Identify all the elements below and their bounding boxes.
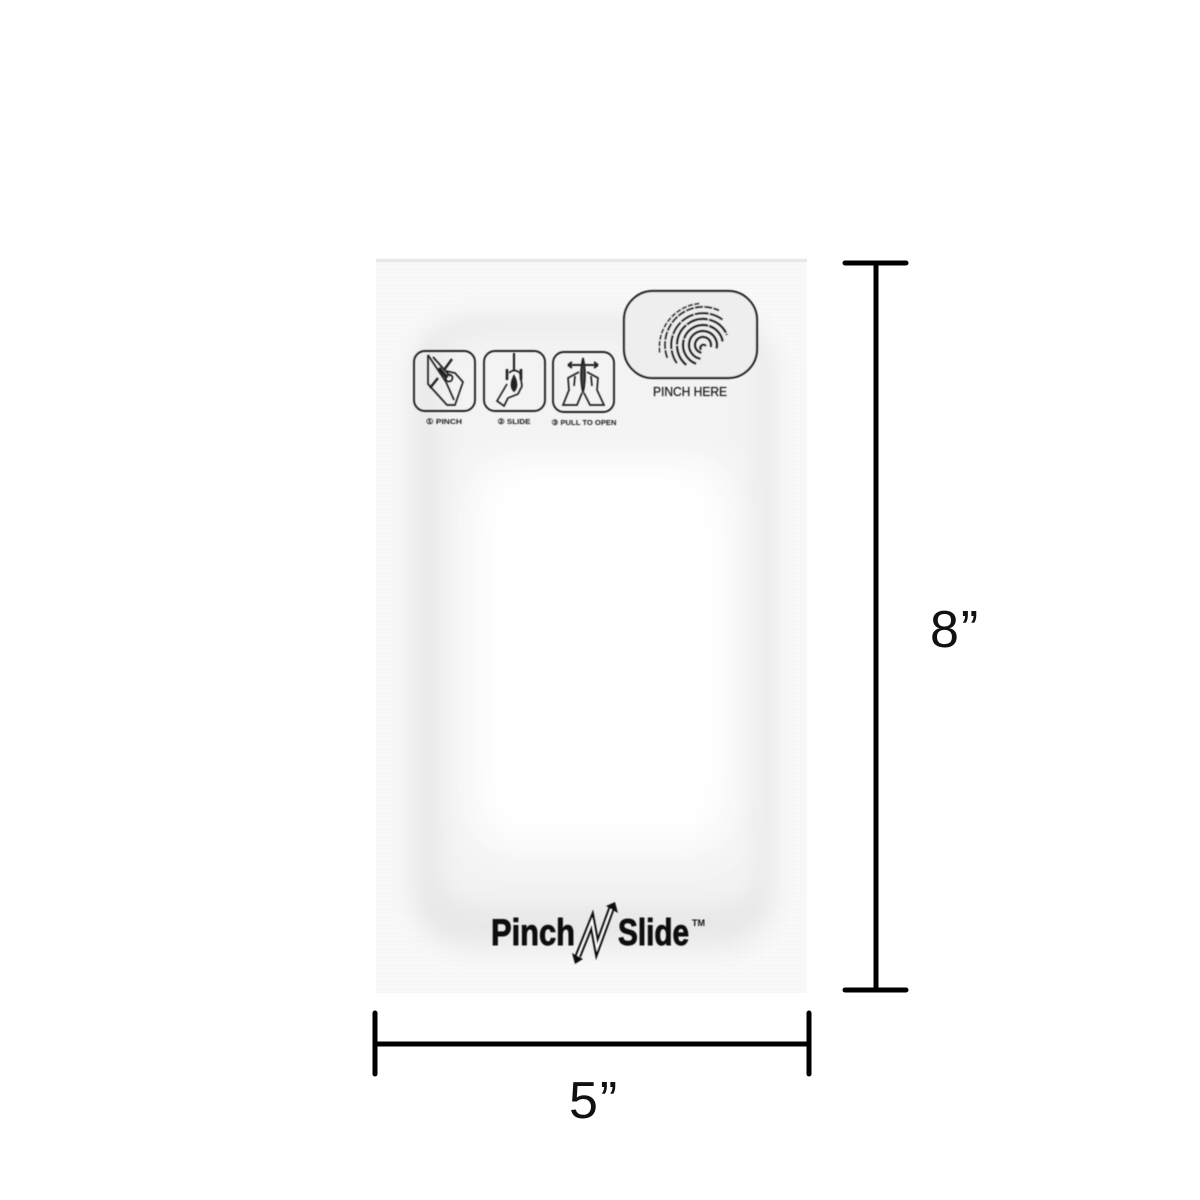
dimension: height: [845, 263, 906, 990]
brand logo: TM: [692, 918, 705, 928]
instruction icon: slide: [484, 351, 545, 411]
instruction label: pull to open: ③ PULL TO OPEN: [552, 418, 616, 427]
brand logo: [491, 902, 705, 964]
icon: fingerprint: [659, 304, 727, 365]
pinch here label: PINCH HERE: [653, 384, 727, 399]
brand logo: Slide: [618, 912, 689, 953]
brand logo: Pinch: [491, 912, 575, 953]
width label: 5”: [569, 1072, 617, 1130]
instruction icon: pinch: [414, 351, 475, 411]
instruction label: pinch: ① PINCH: [426, 417, 462, 426]
dimension: width: [375, 1013, 809, 1074]
instruction label: slide: ② SLIDE: [498, 417, 530, 426]
pouch: [376, 258, 807, 993]
height label: 8”: [930, 601, 978, 659]
pinch here zone with fingerprint: [624, 291, 757, 378]
instruction icon: pull to open: [553, 352, 614, 412]
icon: N arrow: [572, 902, 618, 964]
